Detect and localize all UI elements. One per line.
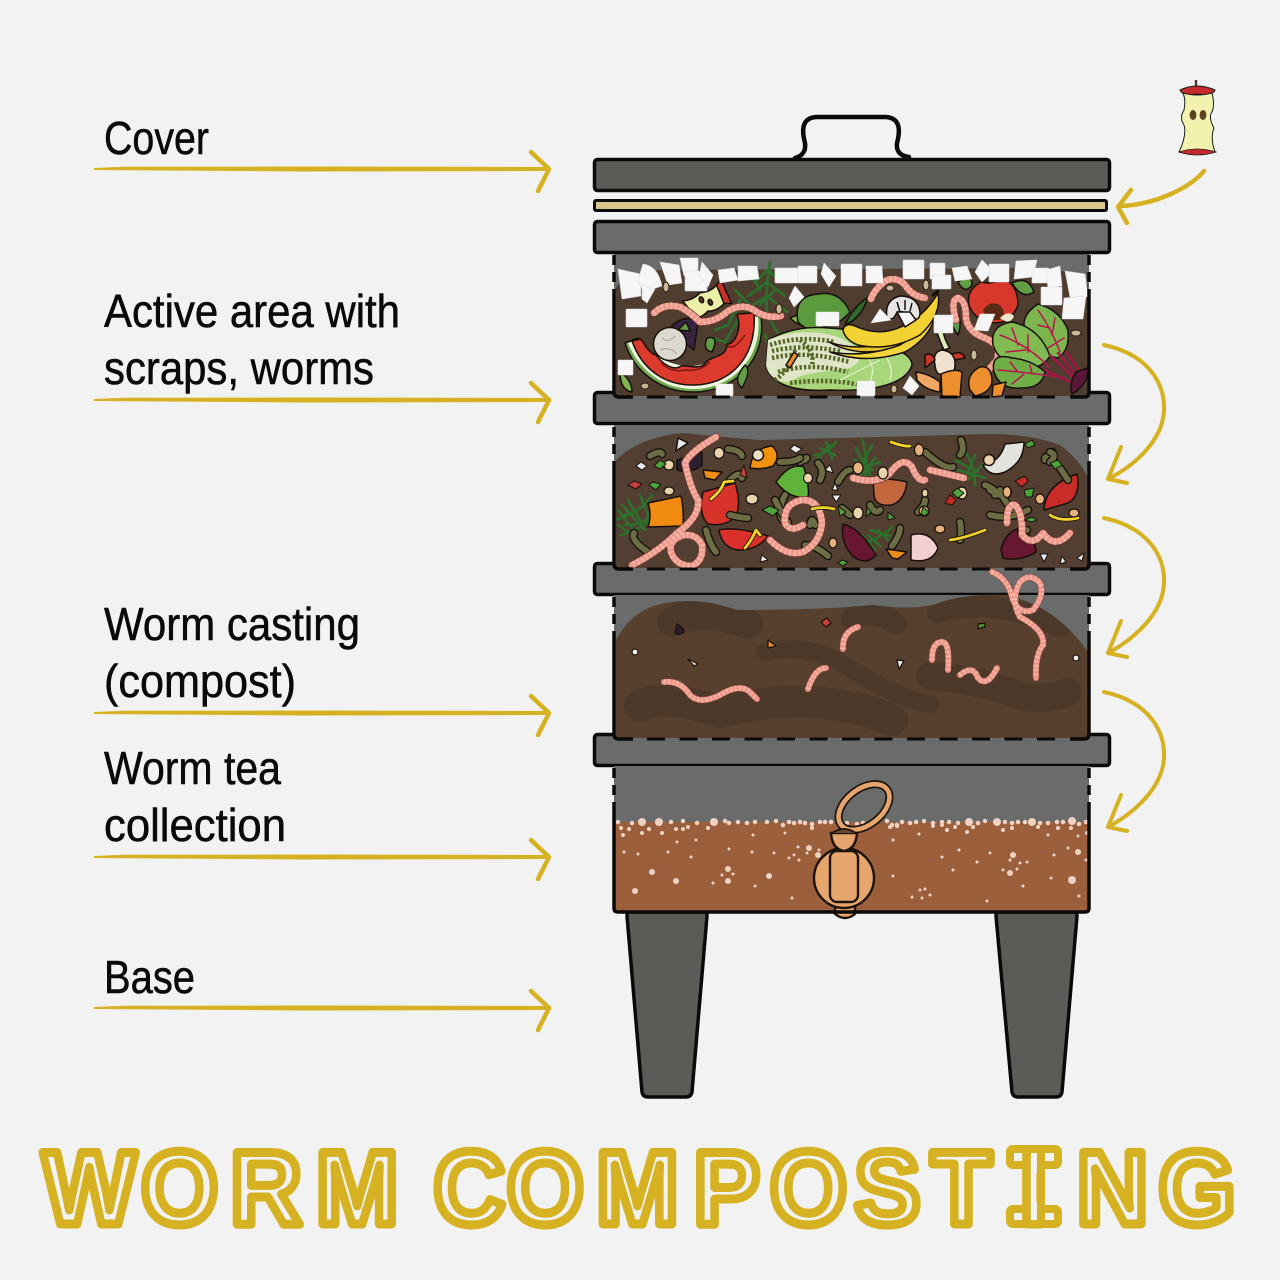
eggplant slice bbox=[654, 318, 698, 360]
tier 4: worm tea collection bbox=[614, 766, 1089, 918]
tap neck bbox=[831, 833, 857, 851]
darker compost blobs bbox=[640, 606, 1068, 720]
small worms bbox=[664, 627, 997, 700]
arrow: cover bbox=[94, 152, 549, 191]
bubbles bbox=[618, 821, 1087, 901]
dill sprig bbox=[712, 262, 787, 360]
flower scrap bbox=[925, 325, 965, 375]
arrow: base bbox=[94, 991, 549, 1030]
worm tier 2 d bbox=[1007, 505, 1070, 542]
worm bin bbox=[594, 117, 1110, 1097]
label: Worm tea: Worm tea bbox=[104, 742, 281, 794]
rim 4 bbox=[594, 734, 1110, 766]
orange peels bbox=[916, 367, 1006, 397]
cover lid bbox=[594, 160, 1110, 190]
tan sheet bbox=[594, 200, 1106, 210]
beans and bits bbox=[664, 444, 1079, 548]
watermelon slice bbox=[625, 313, 762, 392]
tap ring handle bbox=[830, 775, 898, 839]
bin 2 edges bbox=[614, 461, 1089, 569]
banana bbox=[829, 290, 939, 358]
tap bbox=[814, 775, 898, 918]
label: Active area: scraps, worms bbox=[104, 342, 374, 394]
arrow: worm tea bbox=[94, 840, 549, 879]
compost layer bbox=[616, 268, 1088, 396]
arrow: active area bbox=[94, 383, 549, 422]
title: WORM COMPOSTING bbox=[43, 1131, 1235, 1247]
worm tier 2 a bbox=[632, 437, 716, 566]
lid handle bbox=[795, 117, 909, 158]
label: Active area: Active area with bbox=[104, 285, 400, 337]
bin 4 edges bbox=[614, 803, 1089, 912]
compost layer bbox=[616, 595, 1088, 738]
compost bits bbox=[632, 618, 1079, 669]
worm 1 bbox=[654, 306, 781, 322]
rim 3 bbox=[594, 564, 1110, 594]
worm long bbox=[992, 572, 1043, 678]
worm 3 bbox=[953, 298, 998, 372]
rim 2 bbox=[594, 392, 1110, 424]
label: Worm casting: Worm casting bbox=[104, 598, 360, 650]
tier 3: worm casting compost bbox=[614, 572, 1089, 739]
label: Base: Base bbox=[104, 951, 195, 1003]
red apple bbox=[968, 278, 1018, 323]
arrow: tier 3 to tier 4 bbox=[1104, 692, 1164, 831]
label: Cover: Cover bbox=[104, 112, 209, 164]
green leaves small bbox=[620, 278, 1034, 392]
seeds bbox=[641, 280, 1081, 393]
bin 1 edges bbox=[614, 291, 1089, 397]
lettuce bbox=[797, 293, 868, 330]
tier 1: active area with scraps and worms bbox=[614, 253, 1089, 397]
arrow: scraps into bin bbox=[1118, 171, 1204, 223]
cabbage bbox=[766, 327, 912, 390]
worm tier 2 c bbox=[853, 462, 964, 481]
label: Worm casting: (compost) bbox=[104, 655, 296, 707]
label: Worm tea: collection bbox=[104, 799, 286, 851]
label: Worm tea bbox=[104, 742, 286, 851]
olive worms bbox=[633, 440, 1068, 556]
bin 3 edges bbox=[614, 633, 1089, 739]
beet leaves bbox=[993, 304, 1068, 388]
arrow: tier 2 to tier 3 bbox=[1104, 518, 1164, 657]
food scraps bbox=[648, 438, 1078, 561]
icon: apple core bbox=[1179, 80, 1216, 155]
left leg bbox=[627, 912, 707, 1097]
yellow scraps bbox=[711, 442, 1078, 548]
worm 2 bbox=[871, 279, 925, 299]
right leg bbox=[996, 912, 1077, 1097]
label: Worm casting bbox=[104, 598, 360, 707]
rim 1 bbox=[594, 222, 1110, 252]
tap body bbox=[814, 848, 874, 908]
tap spout bbox=[835, 898, 855, 918]
herb sprigs bbox=[616, 440, 985, 550]
beet stems and root bbox=[1045, 352, 1088, 394]
arrow: tier 1 to tier 2 bbox=[1104, 345, 1164, 483]
label: Active area bbox=[104, 285, 400, 394]
apple core scrap bbox=[681, 280, 732, 322]
mushroom bbox=[887, 296, 920, 327]
compost layer bbox=[616, 433, 1088, 568]
paper squares bbox=[618, 258, 1088, 396]
arrow: worm casting bbox=[94, 696, 549, 735]
tier 2: partially digested scraps bbox=[614, 425, 1089, 569]
worm tier 2 b bbox=[770, 500, 822, 553]
worm tea liquid bbox=[616, 822, 1088, 911]
